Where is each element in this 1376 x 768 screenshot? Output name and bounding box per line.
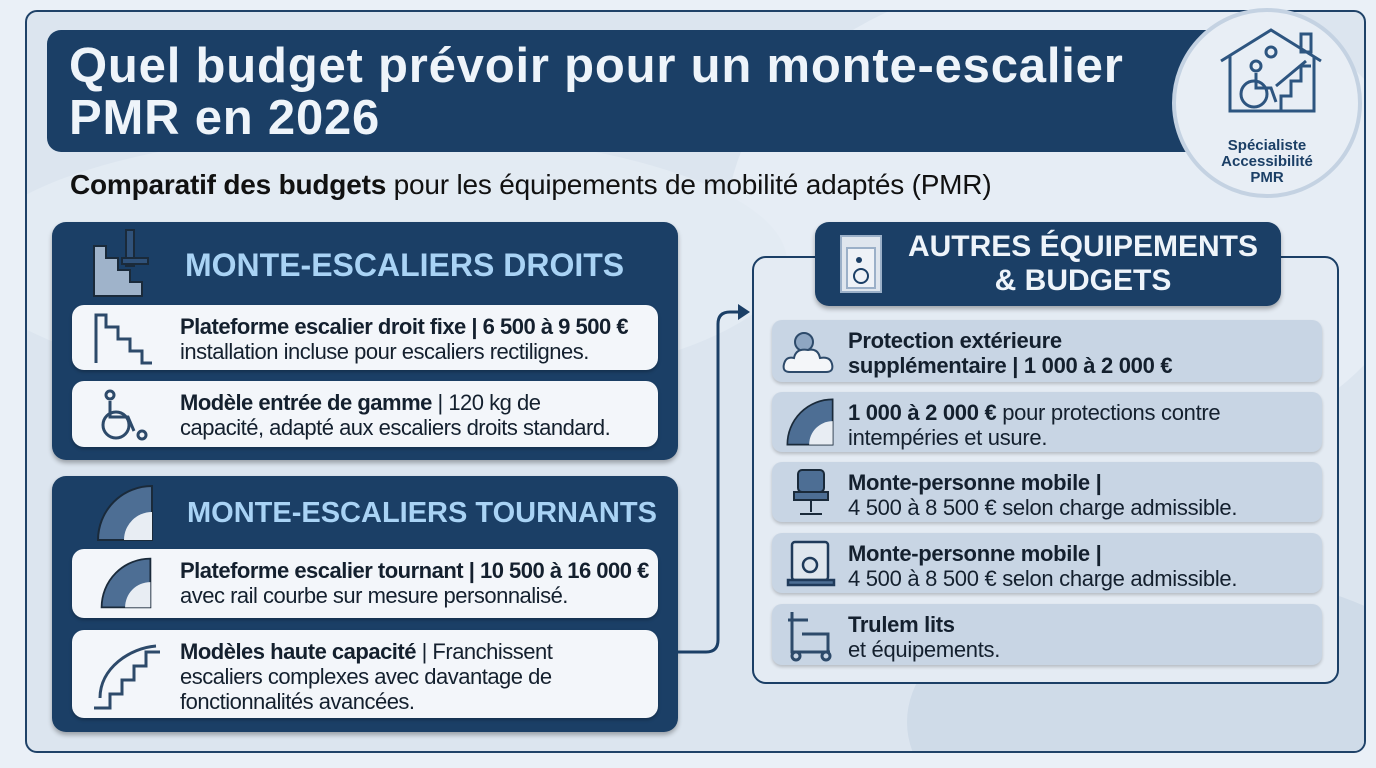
card: plateforme tournant: Plateforme escalier tournant | 10 500 à 16 000 € <box>180 558 649 583</box>
card: protection extérieure: supplémentaire | 1 000 à 2 000 € <box>848 353 1172 378</box>
panel: autres équipements <box>752 256 1339 684</box>
card: haute capacité: Modèles haute capacité | Franchissent <box>180 639 552 664</box>
title banner: Quel budget prévoir pour un monte-escalier <box>69 39 1124 93</box>
card: protection extérieure: Protection extérieure <box>848 328 1062 353</box>
card: plateforme tournant <box>72 549 658 618</box>
card: trulem lits <box>772 604 1322 665</box>
card: protection extérieure <box>772 320 1322 382</box>
card: modèle entrée de gamme: Modèle entrée de gamme | 120 kg de <box>180 390 540 415</box>
card: plateforme droit fixe: Plateforme escalier droit fixe | 6 500 à 9 500 € <box>180 314 628 339</box>
card: protections intempéries: intempéries et usure. <box>848 425 1047 450</box>
arrow: connector <box>678 304 750 654</box>
card: protections intempéries <box>772 392 1322 452</box>
heading: autres équipements: & BUDGETS <box>995 264 1171 297</box>
badge: Spécialiste Accessibilité PMR: Spécialiste <box>1228 137 1306 154</box>
card: trulem lits: et équipements. <box>848 637 1000 662</box>
card: plateforme droit fixe <box>72 305 658 370</box>
card: monte-personne mobile 2 <box>772 533 1322 593</box>
badge: Spécialiste Accessibilité PMR <box>1172 8 1362 198</box>
icon: curved stair <box>97 485 153 541</box>
card: monte-personne mobile 1: Monte-personne mobile | <box>848 470 1102 495</box>
card: haute capacité <box>72 630 658 718</box>
card: modèle entrée de gamme <box>72 381 658 447</box>
panel: monte-escaliers droits <box>52 222 678 460</box>
card: plateforme droit fixe: installation incluse pour escaliers rectilignes. <box>180 339 589 364</box>
icon: stairlift <box>93 229 149 297</box>
card: modèle entrée de gamme: capacité, adapté aux escaliers droits standard. <box>180 415 610 440</box>
heading: MONTE-ESCALIERS DROITS <box>185 247 624 283</box>
panel: monte-escaliers tournants <box>52 476 678 732</box>
card: monte-personne mobile 2: 4 500 à 8 500 € selon charge admissible. <box>848 566 1237 591</box>
title banner: PMR en 2026 <box>69 91 380 145</box>
card: monte-personne mobile 1: 4 500 à 8 500 € selon charge admissible. <box>848 495 1237 520</box>
heading: MONTE-ESCALIERS TOURNANTS <box>187 497 657 529</box>
title banner <box>47 30 1247 152</box>
badge: Spécialiste Accessibilité PMR: Accessibilité <box>1221 153 1313 170</box>
badge: Spécialiste Accessibilité PMR: PMR <box>1250 169 1284 186</box>
subtitle: Comparatif des budgets pour les équipements de mobilité adaptés (PMR) <box>70 169 991 200</box>
heading: autres équipements <box>815 222 1281 306</box>
card: monte-personne mobile 1 <box>772 462 1322 522</box>
card: haute capacité: fonctionnalités avancées. <box>180 689 415 714</box>
card: haute capacité: escaliers complexes avec davantage de <box>180 664 552 689</box>
card: plateforme tournant: avec rail courbe sur mesure personnalisé. <box>180 583 568 608</box>
card: trulem lits: Trulem lits <box>848 612 955 637</box>
card: monte-personne mobile 2: Monte-personne mobile | <box>848 541 1102 566</box>
icon: elevator <box>840 235 882 293</box>
card: protections intempéries: 1 000 à 2 000 € pour protections contre <box>848 400 1220 425</box>
heading: autres équipements: AUTRES ÉQUIPEMENTS <box>908 230 1258 263</box>
